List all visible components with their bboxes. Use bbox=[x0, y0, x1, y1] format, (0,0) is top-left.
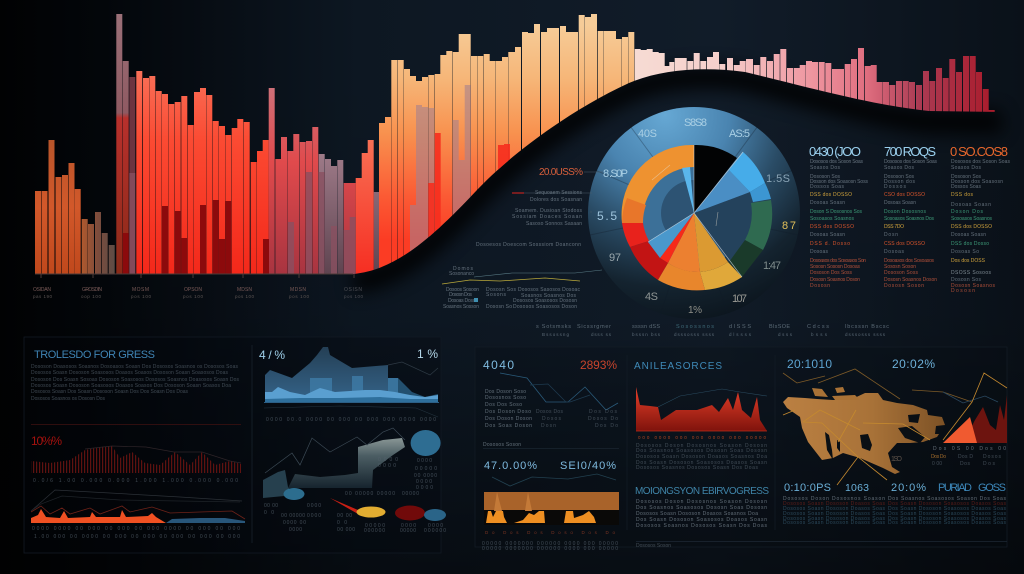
stats: middle left: 47.0.00% bbox=[484, 460, 537, 472]
paragraph: middle column bottom: Dos Soasnos Soasosos Dososn Soas Dososn bbox=[636, 505, 767, 511]
bar: dark mauve bbox=[129, 77, 135, 274]
paragraph rows below map: Dos Soasn Dososon Soasosos Doasos Soas bbox=[888, 506, 1006, 512]
left callouts of pie: Sequoaem Sessions bbox=[535, 190, 582, 196]
wedge: mid blue bbox=[694, 170, 750, 213]
overlay: highlights bbox=[428, 133, 510, 238]
bars: peach group bbox=[379, 14, 634, 274]
stats: map column: 20:1010 bbox=[787, 357, 832, 371]
stats column 2: CSO dos DOSSO bbox=[884, 192, 925, 198]
map with connections: Dos bbox=[983, 461, 996, 467]
stats column 1: Dososos dos Soson Soas bbox=[810, 159, 864, 165]
orange chart: 00000 0000000 000000 0000 000 00000 bbox=[482, 546, 618, 552]
disc segment lines bbox=[590, 115, 798, 315]
stats column 1 bbox=[809, 144, 868, 289]
stats column 1: Dososon Sos bbox=[810, 174, 840, 180]
stats column 2: Dosoas bbox=[884, 249, 904, 255]
stats column 3: DSS dos Dosso bbox=[951, 241, 989, 247]
red stat: 10%% bbox=[31, 434, 62, 448]
ring: orange top bbox=[622, 145, 694, 223]
red spike chart bbox=[943, 395, 1007, 443]
stats column 1: Sosoasos Soasnos bbox=[810, 216, 854, 222]
paragraph rows below map: Dos Soasn Dososon Soasosos Doasos Soas bbox=[888, 520, 1006, 526]
axis ticks and labels: pos 100 bbox=[289, 294, 309, 299]
paragraph: middle column bottom bbox=[636, 499, 768, 529]
axis ticks and labels: MDSN bbox=[290, 287, 306, 293]
axis ticks and labels: OSIDAN bbox=[33, 287, 51, 293]
stats column 1: Dosoasos dos Sosoasos Son bbox=[810, 258, 866, 264]
oval legend markers: 0000 bbox=[416, 479, 432, 485]
stats column 2: Dosoas Soasn bbox=[884, 200, 916, 206]
paragraph rows below map: Dososos Soasn Dososon Doasos Soas bbox=[783, 511, 886, 517]
stats row below map: PURIAD bbox=[938, 482, 972, 494]
bottom pie caption row: dsss ss bbox=[591, 332, 612, 337]
ring: bright red bbox=[622, 223, 649, 247]
bottom pie caption row: dsss bbox=[778, 332, 793, 337]
stats column 3: Soasos Dos bbox=[951, 165, 982, 171]
left callouts of pie: Dolores dos Soasnan bbox=[530, 197, 582, 203]
stats column 3: Dososn bbox=[951, 288, 975, 294]
panel: right dashboard: Dos Do bbox=[595, 423, 618, 429]
bars: tall mauve group bbox=[116, 14, 129, 274]
wedge: red bbox=[660, 213, 694, 263]
stats column 3: Dossos Soas bbox=[951, 184, 982, 190]
axis ticks and labels: OPSON bbox=[184, 287, 202, 293]
pie labels: 4S bbox=[645, 291, 658, 303]
pie labels: 1:47 bbox=[763, 260, 781, 272]
left callouts of pie: Soamem. Dusioan Stodoss bbox=[515, 208, 582, 214]
oval legend markers: 00000 bbox=[365, 523, 385, 529]
left callouts of pie: Soasnos Soasnos Dos bbox=[521, 293, 576, 299]
overlay: dark red segments bbox=[123, 200, 269, 274]
stats column 3: DSS dos bbox=[951, 192, 974, 198]
paragraph rows below map: Dososos Doson Dososnos Soason bbox=[783, 496, 885, 502]
grey area chart: 0000 bbox=[378, 463, 396, 469]
divider rule bbox=[31, 424, 241, 426]
bottom pie caption row: Sosossnos bbox=[676, 324, 714, 330]
stats column 2: 700 ROQS bbox=[884, 144, 936, 159]
oval legend markers: 00 bbox=[264, 510, 274, 516]
map with connections: 0 00 bbox=[932, 461, 942, 467]
panel: right dashboard: Dosn bbox=[541, 423, 556, 429]
orange chart labels: 0000 0000 00 000 00 000 00 000 0000 00 000 00 000 bbox=[32, 526, 240, 532]
paragraph: Dososos Soasn Dos Soasn Dososon Soasn Dos Dos Soasn Dos Doas bbox=[31, 389, 188, 395]
stats row below map: GOSS bbox=[978, 482, 1006, 494]
wedge: blue bbox=[648, 213, 694, 258]
axis ticks and labels: OSISN bbox=[344, 287, 362, 293]
stats column 3: Dosoas So bbox=[951, 249, 979, 255]
oval legend markers: 00 00 bbox=[264, 503, 278, 509]
panel: right dashboard: 20:02% bbox=[892, 357, 935, 371]
rows: Dos Doson Soso bbox=[485, 389, 526, 395]
stats column 2: Dososon Soss bbox=[884, 270, 918, 276]
axis ticks and labels: pas 190 bbox=[33, 294, 52, 299]
oval legend markers: 000000 bbox=[364, 528, 385, 534]
bars: pale to crimson group bbox=[634, 48, 995, 112]
panel: right dashboard: SEI0/40% bbox=[560, 460, 616, 472]
ring: orange lower part bbox=[622, 198, 646, 223]
bottom pie caption row: bsss bbox=[811, 332, 828, 337]
paragraph: middle column bottom: Dos Soasn Dososon Soasosos Doasos Soasn bbox=[636, 517, 767, 523]
stats column 3: 0 SO.COS8 bbox=[950, 144, 1008, 159]
stats column 1: Dosoas Soasn bbox=[810, 232, 845, 238]
oval legend markers: 00000 bbox=[400, 528, 416, 534]
paragraph rows below map: Dos Soasnos Soasosos Soason Dos Soas bbox=[888, 496, 1006, 502]
connection lines bbox=[783, 369, 1007, 485]
bottom pie caption row bbox=[536, 324, 889, 337]
stats column 2: Dossos bbox=[884, 184, 906, 190]
bars: mauve group bbox=[319, 154, 380, 274]
panel: right dashboard: Dosos Dos bbox=[536, 409, 564, 415]
map with connections: Dos D bbox=[958, 454, 973, 460]
oval legend markers: 0000 00 bbox=[283, 520, 306, 526]
stats column 3: Dos dos DOSS bbox=[951, 258, 986, 264]
oval legend markers: 0000 bbox=[401, 523, 416, 529]
stats column 1: Dososn Soasnos Doson bbox=[810, 277, 860, 283]
stats: top left: 4040 bbox=[483, 358, 514, 372]
panel: right dashboard: Dososos Soson bbox=[483, 442, 521, 448]
stats column 1: Dososon Dos Soss bbox=[810, 270, 852, 276]
oval legend markers: 0000 bbox=[417, 458, 432, 464]
axis ticks and labels: oop 100 bbox=[81, 294, 101, 299]
panel: right dashboard bbox=[475, 347, 1007, 552]
grey area chart: 00 00000 00000 bbox=[345, 491, 395, 497]
oval legend markers: 00 00 bbox=[337, 513, 352, 519]
panel: right dashboard: Dos Dos Soso bbox=[485, 402, 522, 408]
panel: left dashboard: 1.00 000 00 0000 00 000 00 000 00 000 00 000 00 000 bbox=[34, 534, 240, 540]
bottom pie caption row: Cdcss bbox=[807, 324, 829, 330]
map with connections: Dosos bbox=[983, 454, 1002, 460]
stats column 1: Sososn Sososn Dosoas bbox=[810, 264, 860, 270]
stats column 2: Dosson dos bbox=[884, 179, 916, 185]
paragraph rows below map: Dos Soasn Dososon Soasosos Doasos Soas bbox=[888, 511, 1006, 517]
stats column 1: DSS dos DOSSO bbox=[810, 192, 852, 198]
pie labels: 5.5 bbox=[597, 209, 617, 223]
paragraph rows below map: Dososos Soasn Dososon Doasos Soas bbox=[783, 520, 886, 526]
stats column 3: Dosoas Soasn bbox=[951, 202, 991, 208]
axis ticks and labels: GROSDIN bbox=[82, 287, 102, 293]
red chart labels: 0.0/6 1.00 0.000 0.000 1.000 1.000 0.000 0.000 bbox=[33, 478, 238, 484]
axis ticks and labels: pos 100 bbox=[235, 294, 254, 299]
stats column 2: Dososn Soson bbox=[884, 283, 924, 289]
stats row below map bbox=[784, 482, 1006, 494]
left callouts of pie: Dososos Soasosos Doson bbox=[513, 304, 577, 310]
oval legend markers: 00 0000 bbox=[414, 473, 437, 479]
left callouts of pie: Dososn Sos bbox=[486, 287, 516, 293]
stats column 3: DSOSS Sosoos bbox=[951, 270, 992, 276]
ring: dark red bbox=[630, 241, 668, 280]
paragraph: middle column top: Dososos Soasn Dososon Doasos Soasnos Doa bbox=[636, 454, 767, 460]
white dividers bbox=[648, 145, 743, 277]
pie labels: 40S bbox=[638, 128, 657, 140]
axis ticks and labels: pos 100 bbox=[131, 294, 151, 299]
stats column 3: Dososn Soasnos bbox=[951, 283, 996, 289]
paragraph: middle column bottom: Dososos Doson Dososnos Soason Dososn bbox=[636, 499, 767, 505]
axis ticks and labels bbox=[33, 274, 363, 299]
pie labels bbox=[597, 117, 796, 316]
stats column 2: Soasos Dos bbox=[884, 165, 914, 171]
panel: right dashboard: Dos Doson Doson bbox=[485, 416, 532, 422]
inner blue disc bbox=[640, 159, 748, 267]
orange chart bbox=[482, 492, 619, 552]
stats column 1: Dossos Soas bbox=[810, 184, 844, 190]
paragraph rows below map: Dososos Soasn Dososon Doasos Soas bbox=[783, 501, 886, 507]
stats column 1: 0430 (JOO bbox=[809, 144, 861, 159]
paragraph: middle column bottom: Dososos Soasn Dososon Doasos Soasnos Doa bbox=[636, 511, 758, 517]
left callouts of pie: Dososn So bbox=[486, 304, 512, 310]
paragraph: Dososon Doasosos Soasnos Dosoasos Soasn Dos Dososos Soasnos os Dososos Soas bbox=[31, 364, 238, 370]
paragraph: middle column top bbox=[636, 443, 767, 471]
stats column 2: Dososn Soasnos Doson bbox=[884, 277, 937, 283]
blue area chart: 1% bbox=[417, 347, 438, 361]
orange area chart bbox=[31, 490, 245, 523]
bottom pie caption row: dsssosss ssss bbox=[845, 332, 886, 337]
oval legend markers: 00 000 bbox=[337, 527, 355, 533]
heading: TROLESDO FOR GRESS bbox=[34, 349, 155, 361]
axis ticks and labels: MOSM bbox=[132, 287, 149, 293]
stats column 2: Dososon Sos bbox=[884, 174, 914, 180]
wedge: black bbox=[694, 145, 737, 213]
overlay: lavender segments bbox=[410, 85, 471, 252]
bottom pie caption row: dlSSS bbox=[729, 324, 751, 330]
wedge: orange bbox=[668, 213, 700, 272]
left callouts of pie: Dosoos Sosoon bbox=[446, 287, 479, 293]
grey area chart: 00000 bbox=[402, 491, 419, 497]
paragraph: Dososos Soasn Dososon Soasosos Doasos Soasos Dos Dososon Soasn Soasos Doa bbox=[31, 383, 231, 389]
map islands bbox=[812, 387, 860, 400]
oval legend markers: 0000 bbox=[428, 523, 443, 529]
wedge: light blue bbox=[682, 167, 694, 213]
pie labels: 107 bbox=[732, 293, 747, 305]
panel: right dashboard: Dososnos Soso bbox=[485, 395, 526, 401]
stats column 2: Dososos dos Soson Soas bbox=[884, 159, 938, 165]
left callouts of pie: Dososos Soasosos Dososn bbox=[513, 298, 577, 304]
pie labels: AS:5 bbox=[729, 128, 750, 140]
stats column 1: Soasos Dos bbox=[810, 165, 840, 171]
paragraph rows below map: Dos Soasn Dososon Soasosos Doasos Soas bbox=[888, 501, 1006, 507]
bottom pie caption row: ssssn dSS bbox=[632, 324, 660, 330]
stats column 2: DSS 7DO bbox=[884, 224, 904, 230]
ring: dark green bbox=[729, 240, 763, 277]
stats column 3 bbox=[950, 144, 1010, 294]
left callouts of pie: Dososos Sasosos Dosoac bbox=[518, 287, 580, 293]
panel: right dashboard: Dosos bbox=[542, 416, 562, 422]
panel: donut pie chart bbox=[588, 107, 800, 319]
bars: brown group bbox=[82, 212, 115, 274]
map with connections: 1SO bbox=[891, 456, 903, 463]
left callouts of pie: Sosons bbox=[486, 292, 506, 298]
stats column 2: Sosoasos Soasnos Dos bbox=[884, 216, 934, 222]
panel: right dashboard: Dos Dos bbox=[589, 409, 618, 415]
blue area chart: 0000 00.0 0000 00 000 00 000 000 0000 0000 bbox=[266, 417, 436, 423]
axis ticks and labels: pos 100 bbox=[183, 294, 203, 299]
paragraph: middle column top: Dososos Soasnos Dososos Soasn Dos Doas bbox=[636, 465, 758, 471]
heading: middle column bottom: MOIONGSYON EBIRVOGRESS bbox=[635, 486, 769, 497]
oval legend markers bbox=[264, 430, 446, 534]
red bar chart bbox=[31, 446, 241, 473]
paragraph: Dososon Dos Soasn Sosoas Dososon Soasosos Dososos Soasnos Doasosos Soasn Dos bbox=[31, 377, 240, 383]
pie labels: 87 bbox=[782, 220, 796, 232]
map with connections: Dos 0S 00 Dos 00 bbox=[933, 446, 1006, 452]
stats column 3: DSS dos DOSSO bbox=[951, 224, 992, 230]
map with connections: Dos bbox=[960, 461, 970, 467]
stats column 2: Dosoasos dos Sosoasos bbox=[884, 258, 934, 264]
bars: red group bbox=[136, 71, 269, 274]
blue area chart bbox=[259, 347, 439, 423]
bottom pie caption row: Bssossng bbox=[542, 332, 569, 337]
bars: salmon group bbox=[356, 140, 374, 274]
left callouts of pie: Sossiam Doaces Soaan bbox=[512, 214, 582, 220]
paragraph: middle column top: Dos Soasnos Soasosos Dososn Soas Dososn bbox=[636, 448, 767, 454]
paragraph bbox=[31, 364, 240, 402]
stats column 2 bbox=[884, 144, 938, 289]
inner core bbox=[661, 180, 727, 246]
left callouts of pie: Dososn Dos bbox=[449, 292, 472, 298]
bottom pie caption row: Sicssrgmer bbox=[577, 324, 611, 330]
panel: right dashboard: 2893% bbox=[580, 358, 617, 372]
red area chart: 000 0000 000 000 0000 000 00000 bbox=[638, 435, 766, 440]
left callouts of pie bbox=[442, 167, 603, 310]
red area chart bbox=[636, 387, 767, 440]
stats column 1: Dosoas bbox=[810, 249, 828, 255]
oval legend markers: 000000 bbox=[424, 528, 446, 534]
panel: right dashboard: Dososos Soson bbox=[636, 543, 671, 549]
oval legend markers: 0000 bbox=[289, 527, 302, 533]
panel: left dashboard bbox=[24, 337, 441, 553]
pie labels: S8S8 bbox=[684, 117, 707, 129]
orange chart: 00000 0000000 000000 0000 000 00000 bbox=[482, 541, 618, 547]
bottom pie caption row: dsssosss ssss bbox=[674, 332, 715, 337]
stats column 1: Dososn bbox=[810, 283, 830, 289]
stats row below map: 0:10:0PS bbox=[784, 482, 831, 494]
paragraph rows below map: Dos Soasn Dososon Soasosos Doasos Soas bbox=[888, 516, 1006, 522]
bottom pie caption row: s Sotsmsks bbox=[536, 324, 571, 330]
stats column 1: DSS d. Dosso bbox=[810, 241, 850, 247]
oval legend markers: 0000 bbox=[307, 503, 321, 509]
curve shadow bbox=[353, 77, 1002, 282]
axis ticks and labels: MDSN bbox=[237, 287, 252, 293]
orange chart: Do Dos Dos Doso Dos Do bbox=[485, 530, 615, 535]
stats column 3: Doson Dos bbox=[951, 209, 984, 215]
pie labels: 1.5S bbox=[766, 173, 790, 185]
bottom pie caption row: Ibcsssn Bscsc bbox=[845, 324, 889, 330]
paragraph: Dososos Soasn Dososon Soasosos Doasos Soasos Dososon Soasn Soasosos Doas bbox=[31, 370, 228, 376]
paragraph: middle column top: Dos Soasn Dososon Soasosos Doasos Soasn bbox=[636, 460, 767, 466]
stats column 2: Dosn bbox=[884, 232, 898, 238]
stats column 3: Dososos dos Soson Soas bbox=[951, 159, 1010, 165]
stats row below map: 1063 bbox=[845, 482, 869, 494]
stats column 2: Doson Dososnos bbox=[884, 209, 926, 215]
left callouts of pie: Dosoesos Doescom Sosssiom Doanconn bbox=[476, 242, 581, 248]
paragraph: middle column top: Dososos Doson Dososnos Soason Dososn bbox=[636, 443, 767, 449]
panel: right dashboard: Dos Soas Doson bbox=[485, 423, 532, 429]
bars: rose group bbox=[269, 88, 356, 274]
bottom pie caption row: dlssss bbox=[729, 332, 752, 337]
pie labels: 8 .S0P bbox=[603, 168, 628, 180]
paragraph rows below map: Dososos Soasn Dososon Doasos Soas bbox=[783, 516, 886, 522]
map land bbox=[783, 393, 945, 474]
stats column 3: Sosoasos Soasnos bbox=[951, 216, 992, 222]
grey area chart bbox=[263, 428, 419, 498]
left callouts of pie: Dosoas Doson bbox=[448, 298, 478, 304]
paragraph: Dososos Soasnos os Dososn Dos bbox=[31, 396, 106, 402]
lower right dark sector bbox=[694, 192, 754, 262]
stats column 2: CSS dos DOSSO bbox=[884, 241, 925, 247]
paragraph rows below map bbox=[783, 496, 1006, 526]
heading: middle column: ANILEASORCES bbox=[634, 361, 722, 372]
stats column 1: Dosoas Soasn bbox=[810, 200, 845, 206]
stats column 1: DSS dos DOSSO bbox=[810, 224, 854, 230]
bottom pie caption row: BlsSOE bbox=[769, 324, 790, 330]
stats column 1: Dosson dos Soasosn Soss bbox=[810, 179, 868, 185]
oval legend markers: 00 00000 bbox=[281, 513, 305, 519]
blue area chart: 4/% bbox=[259, 348, 285, 362]
ring: light blue bbox=[750, 183, 771, 202]
pie labels: 1% bbox=[688, 305, 702, 316]
wedge: gold bbox=[694, 213, 728, 272]
ring: gold bottom bbox=[700, 262, 742, 290]
stats column 3: Dosoas Soasn bbox=[951, 232, 986, 238]
map lakes bbox=[825, 414, 945, 460]
map with connections: Dos Do bbox=[931, 454, 946, 460]
main bar chart bbox=[35, 14, 995, 274]
left callouts of pie: Sosonanco bbox=[449, 271, 474, 277]
stats column 3: Dosson dos Soasosn bbox=[951, 179, 1003, 185]
paragraph: middle column bottom: Dososos Soasnos Dososos Soasn Dos Doas bbox=[636, 523, 768, 529]
left callouts of pie: Domos bbox=[453, 266, 474, 272]
map with connections bbox=[783, 369, 1007, 485]
oval legend markers: 00 bbox=[337, 520, 347, 526]
left callouts of pie: Sasoso Sonnos Sasaan bbox=[526, 221, 582, 227]
axis ticks and labels: pos 100 bbox=[344, 294, 363, 299]
panel: right dashboard: Dosos Do bbox=[588, 416, 618, 422]
oval legend markers: 00000 bbox=[415, 466, 437, 472]
stats column 3: Dososn Sos bbox=[951, 277, 982, 283]
oval legend markers: 0000 bbox=[416, 485, 433, 491]
bottom pie caption row: bsssn bss bbox=[632, 332, 661, 337]
outer disc bbox=[588, 107, 800, 319]
bars: orange group bbox=[35, 140, 81, 274]
stats column 3: Dososon Sos bbox=[951, 174, 982, 180]
left callouts of pie: 20.0USS% bbox=[539, 167, 583, 178]
stats row below map: 20:0% bbox=[891, 482, 926, 494]
oval legend markers: 0000 bbox=[307, 513, 321, 519]
paragraph rows below map: Dososos Soasn Dososon Doasos Soas bbox=[783, 506, 886, 512]
ring: green bbox=[745, 200, 772, 250]
ring: orange bottom bbox=[658, 263, 705, 290]
stats column 1: Doson S Dososnos Sos bbox=[810, 209, 862, 215]
ring: bright blue bbox=[729, 152, 765, 192]
left callouts of pie: Soasnos Sosson bbox=[443, 304, 479, 310]
overlay: mauve segments bbox=[129, 172, 356, 274]
line chart bbox=[500, 373, 618, 410]
stats column 2: Sososn Soson bbox=[884, 264, 916, 270]
grey area chart: 0000 bbox=[378, 457, 398, 463]
pie labels: 97 bbox=[609, 252, 621, 264]
panel: right dashboard: Dos Doson Doso bbox=[485, 409, 531, 415]
